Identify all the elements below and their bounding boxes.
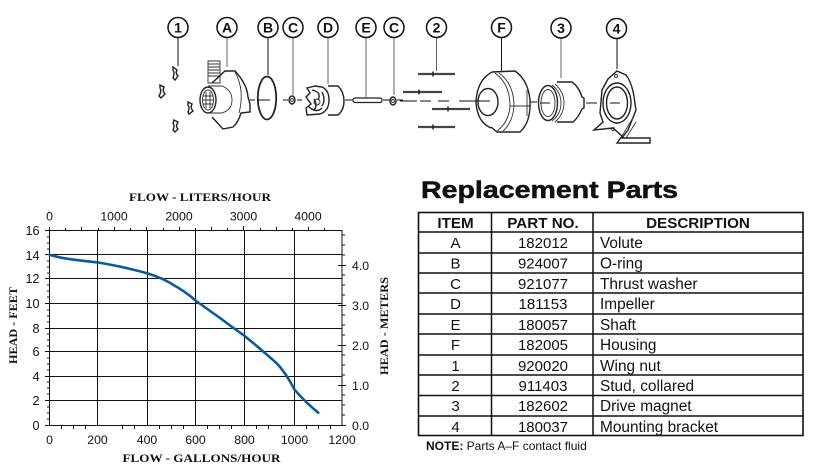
parts table — [418, 212, 803, 436]
callout: 3: 3 — [557, 20, 565, 36]
description column: Stud, collared — [600, 378, 694, 395]
exploded pump parts diagram — [159, 18, 650, 143]
grid lines — [45, 226, 346, 429]
description column: Wing nut — [600, 358, 661, 375]
callout: 3 — [551, 18, 571, 38]
part number column: 920020 — [518, 358, 568, 375]
bottom axis labels: 600 — [185, 433, 206, 447]
bottom axis labels: 1200 — [328, 433, 356, 447]
bottom axis labels: 800 — [234, 433, 255, 447]
top axis labels: 2000 — [165, 210, 193, 224]
icon: drive magnet — [538, 82, 584, 122]
icon: volute — [200, 61, 250, 129]
chart title: flow liters per hour: FLOW - LITERS/HOUR — [129, 192, 272, 204]
right axis labels — [352, 259, 369, 433]
description column: Impeller — [600, 296, 655, 313]
left axis labels: 4 — [32, 370, 40, 384]
callout: D: D — [323, 20, 333, 36]
description column: Mounting bracket — [600, 419, 719, 436]
callout: F: F — [497, 20, 506, 36]
item column: F — [451, 337, 460, 354]
bottom axis labels: 0 — [46, 433, 53, 447]
performance chart — [8, 192, 391, 464]
right axis labels: 3.0 — [352, 299, 369, 313]
callout: A — [217, 18, 237, 38]
right axis labels: 1.0 — [352, 379, 369, 393]
pump curve — [50, 255, 318, 413]
left axis labels: 10 — [25, 297, 40, 311]
icon: impeller — [306, 86, 344, 115]
bottom axis labels: 400 — [137, 433, 157, 447]
part number column: 180037 — [518, 419, 568, 436]
callout leaders and axis dashes — [178, 37, 620, 106]
description column: Housing — [600, 337, 656, 354]
description column: Thrust washer — [600, 276, 698, 293]
item column: 3 — [451, 398, 460, 415]
left axis labels: 14 — [25, 249, 40, 263]
part number column: 182005 — [518, 337, 568, 354]
part number column: 181153 — [519, 296, 567, 313]
icon: o-ring — [258, 76, 276, 120]
item column: E — [450, 317, 461, 334]
part number column: 911403 — [519, 378, 567, 395]
left axis labels: 8 — [32, 322, 40, 336]
callout: D — [318, 18, 338, 38]
heading: replacement parts: Replacement Parts — [421, 177, 678, 204]
callout: C — [283, 18, 303, 38]
callout: C second — [384, 18, 404, 38]
bottom axis labels: 200 — [87, 433, 108, 447]
callout: B: B — [263, 20, 273, 36]
icon: mounting bracket — [594, 71, 650, 143]
left axis labels: 0 — [32, 419, 40, 433]
callout: 1 — [168, 18, 188, 38]
callout: B — [258, 18, 278, 38]
right axis title: HEAD - METERS — [379, 277, 391, 375]
note: NOTE: Parts A–F contact fluid — [426, 439, 587, 453]
left axis labels: 2 — [32, 394, 40, 408]
callout: A: A — [222, 20, 232, 36]
top axis labels — [46, 210, 322, 224]
left axis labels: 16 — [25, 224, 40, 238]
top axis labels: 4000 — [294, 210, 322, 224]
callout: 2: 2 — [433, 20, 441, 36]
item column — [450, 235, 461, 436]
item column: B — [450, 256, 461, 272]
description column: O-ring — [600, 256, 643, 272]
callout: F — [492, 18, 512, 38]
part number column: 924007 — [518, 256, 568, 272]
callout: 4: 4 — [613, 20, 621, 36]
icon: housing — [475, 71, 530, 132]
part number column — [518, 235, 568, 436]
callout: 1: 1 — [174, 20, 182, 36]
item column: 4 — [451, 419, 460, 436]
icon: thrust washer front — [289, 96, 295, 104]
part number column: 182602 — [518, 398, 568, 415]
description column: Shaft — [600, 317, 637, 334]
part number column: 180057 — [518, 317, 568, 334]
item column: 2 — [451, 378, 460, 395]
icon: wing nuts — [159, 67, 193, 132]
bottom axis labels — [46, 433, 356, 447]
part number column: 182012 — [518, 235, 568, 252]
callout: E — [356, 18, 376, 38]
left axis labels — [25, 224, 40, 433]
top axis labels: 3000 — [230, 210, 257, 224]
right axis labels: 4.0 — [352, 259, 369, 273]
callout: E: E — [361, 20, 371, 36]
description column — [600, 235, 719, 436]
description column: Drive magnet — [600, 398, 692, 415]
table header: DESCRIPTION — [646, 215, 750, 232]
icon: shaft — [345, 98, 382, 102]
right axis labels: 0.0 — [352, 419, 369, 433]
right axis labels: 2.0 — [352, 339, 369, 353]
icon: thrust washer rear — [390, 97, 396, 105]
table header: ITEM — [437, 215, 474, 232]
top axis labels: 0 — [46, 210, 53, 224]
icon: collared studs — [403, 72, 470, 130]
part number column: 921077 — [518, 276, 568, 293]
table grid — [418, 212, 803, 436]
left axis labels: 12 — [25, 272, 40, 286]
item column: D — [450, 296, 461, 313]
callout: 2 — [426, 18, 446, 38]
description column: Volute — [600, 235, 643, 252]
left axis labels: 6 — [32, 345, 40, 359]
callout: C: C — [288, 20, 298, 36]
table header: PART NO. — [507, 215, 579, 232]
top axis labels: 1000 — [100, 210, 128, 224]
callout: C second: C — [389, 20, 399, 36]
item column: 1 — [451, 358, 460, 375]
table header — [437, 215, 750, 232]
left axis title: HEAD - FEET — [8, 287, 20, 364]
item column: C — [450, 276, 461, 293]
callout: 4 — [606, 18, 626, 38]
bottom axis labels: 1000 — [281, 433, 308, 447]
item column: A — [450, 235, 461, 252]
